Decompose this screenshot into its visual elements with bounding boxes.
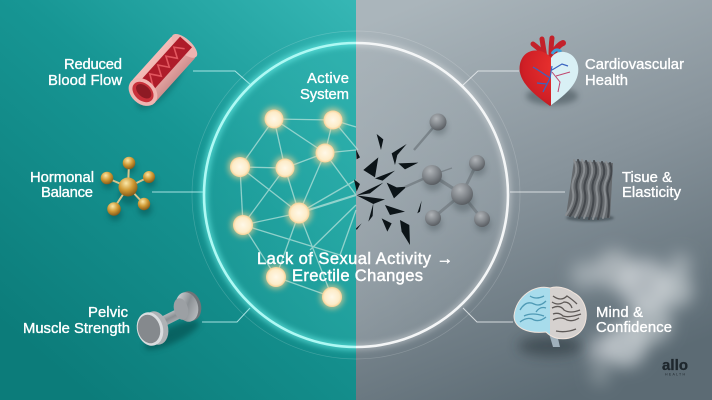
- smoke cloud: [571, 250, 693, 385]
- label: tissue and elasticity: [622, 170, 682, 201]
- label: cardiovascular health: [585, 57, 684, 89]
- gray molecule shadows: [423, 119, 491, 232]
- label: pelvic muscle strength: [23, 305, 130, 337]
- label: hormonal balance: [30, 170, 94, 201]
- background: teal half: [0, 0, 356, 400]
- label: reduced blood flow: Blood Flow: [48, 73, 122, 89]
- icon: brain: [514, 287, 586, 356]
- label: tissue and elasticity: Elasticity: [622, 185, 682, 201]
- label: reduced blood flow: [48, 57, 122, 89]
- icon: blood vessel: [123, 30, 201, 116]
- label: cardiovascular health: Health: [585, 73, 628, 89]
- shattered cracks: [354, 134, 422, 245]
- icon: gold molecule: [101, 157, 156, 221]
- background: gray half: [356, 0, 712, 400]
- glowing network: [228, 107, 358, 309]
- network nodes glow: [228, 107, 345, 309]
- connector lines: [152, 71, 565, 322]
- gray molecule atoms: [422, 114, 490, 227]
- label: active system: Active: [307, 71, 349, 87]
- network links: [240, 119, 358, 297]
- central heading: [257, 250, 453, 285]
- central circle disc: [210, 121, 503, 346]
- logo: allo health: allo: [662, 357, 688, 374]
- label: mind and confidence: [596, 305, 672, 336]
- label: tissue and elasticity: Tisue &: [622, 170, 672, 186]
- label: mind and confidence: Mind &: [596, 305, 643, 321]
- central heading: Lack of Sexual Activity →: [257, 250, 453, 268]
- icon: heart: [520, 38, 578, 106]
- network nodes: [230, 110, 342, 307]
- glowing ring: [192, 31, 520, 359]
- icon: tissue fibers: [566, 160, 614, 222]
- broken gray molecule: [405, 114, 491, 232]
- gray molecule bonds: [405, 122, 482, 219]
- label: cardiovascular health: Cardiovascular: [585, 57, 684, 73]
- label: mind and confidence: Confidence: [596, 320, 672, 336]
- label: hormonal balance: Hormonal: [30, 170, 94, 186]
- icon: dumbbell: [133, 289, 205, 355]
- label: hormonal balance: Balance: [41, 185, 93, 201]
- label: pelvic muscle strength: Muscle Strength: [23, 321, 130, 337]
- label: pelvic muscle strength: Pelvic: [88, 305, 129, 321]
- label: active system: System: [300, 87, 349, 103]
- label: reduced blood flow: Reduced: [64, 57, 122, 73]
- logo: allo health: HEALTH: [665, 372, 685, 376]
- central heading: Erectile Changes: [292, 267, 423, 285]
- label: active system: [300, 71, 349, 103]
